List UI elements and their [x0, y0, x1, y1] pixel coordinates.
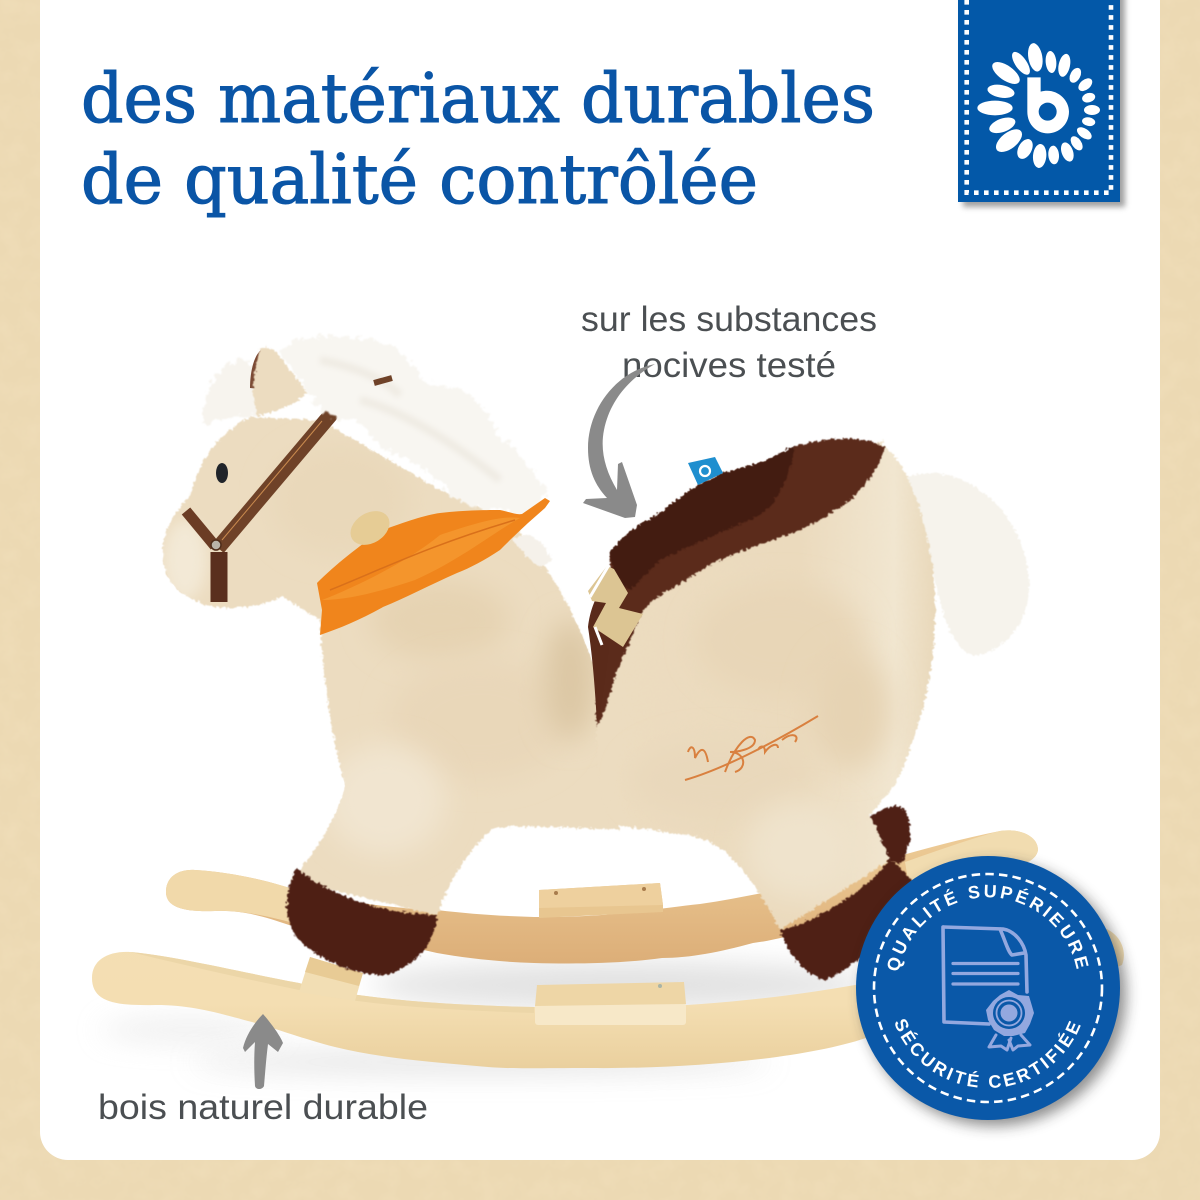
bridle — [186, 412, 333, 602]
badge text: SÉCURITÉ CERTIFIÉE — [895, 1019, 1081, 1088]
badge text: QUALITÉ SUPÉRIEURE — [888, 884, 1089, 970]
front rocker — [92, 925, 1124, 1068]
front hoof — [287, 868, 437, 975]
orange bandana — [317, 498, 550, 635]
seat strap and buckle — [588, 565, 643, 723]
icon: rosette seal — [986, 990, 1034, 1050]
callout: substances text: sur les substances — [581, 300, 877, 339]
handle peg — [344, 504, 396, 552]
logo tag — [958, 0, 1125, 207]
title: de qualité contrôlée — [81, 141, 758, 220]
mane tuft under bandana — [512, 535, 552, 568]
arrow: to wood — [243, 1014, 283, 1089]
badge: quality seal — [853, 853, 1136, 1136]
icon: flower b logo — [977, 42, 1100, 169]
horse: rear body — [597, 440, 935, 980]
horse: front body and head — [163, 417, 620, 975]
horse eye — [216, 463, 228, 483]
horse tail — [905, 474, 1029, 656]
title — [81, 60, 875, 220]
horse mane — [280, 336, 547, 520]
badge text — [888, 884, 1089, 1088]
saddle — [588, 438, 885, 727]
back crossbar block — [539, 883, 663, 918]
callout: substances text — [581, 300, 877, 385]
back rocker — [166, 830, 1038, 963]
foot step block — [299, 957, 363, 1001]
title: des matériaux durables — [81, 60, 875, 139]
front crossbar block — [535, 982, 686, 1025]
callout: substances text: nocives testé — [622, 346, 836, 385]
embroidered signature — [685, 716, 818, 780]
horse ear and forelock — [203, 347, 307, 425]
callout: wood text: bois naturel durable — [98, 1088, 428, 1127]
far hind hoof — [865, 806, 910, 865]
blue tag label — [688, 457, 723, 485]
rear hoof — [780, 858, 912, 980]
arrow: to saddle — [583, 364, 655, 518]
icon: certificate — [943, 927, 1034, 1050]
floor shadows — [100, 961, 870, 1072]
